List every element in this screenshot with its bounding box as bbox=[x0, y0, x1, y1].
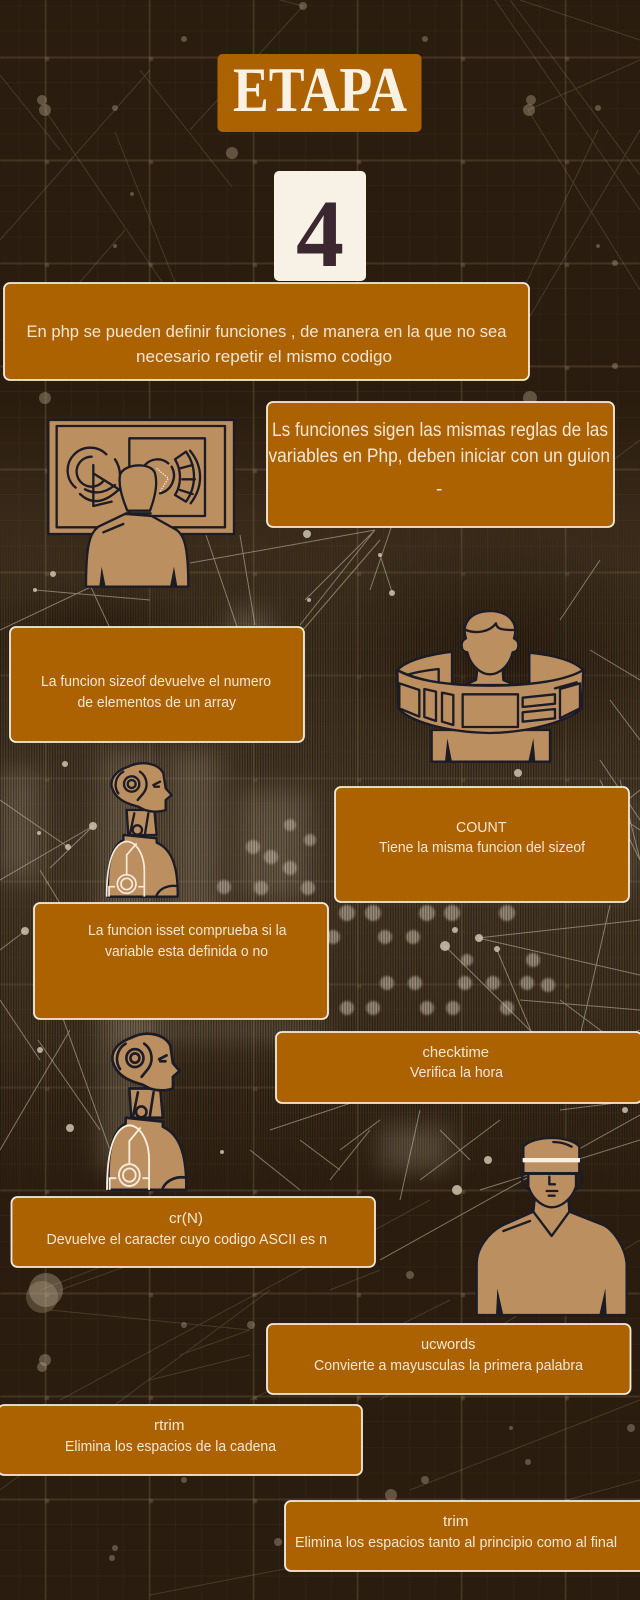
number card: 4: 4 bbox=[296, 180, 344, 287]
icon: person inside holographic ring bbox=[397, 611, 583, 762]
panel: reglas de las funciones: - bbox=[436, 479, 442, 500]
panel: checktime: checktime bbox=[422, 1045, 489, 1061]
panel: checktime bbox=[276, 1032, 640, 1103]
panel: cr(N) bbox=[12, 1197, 375, 1267]
panel: rtrim: Elimina los espacios de la cadena bbox=[65, 1439, 277, 1455]
panel: definir funciones: necesario repetir el mismo codigo bbox=[136, 347, 392, 366]
panel: ucwords bbox=[267, 1324, 630, 1394]
panel: reglas de las funciones bbox=[267, 402, 614, 527]
panel: reglas de las funciones: Ls funciones sigen las mismas reglas de las bbox=[272, 420, 608, 441]
icon: robot bust bbox=[107, 763, 178, 897]
panel: trim bbox=[285, 1501, 640, 1571]
panel: sizeof: La funcion sizeof devuelve el numero bbox=[41, 674, 271, 690]
panel: rtrim bbox=[0, 1405, 362, 1475]
icon: person at dashboard bbox=[48, 420, 234, 587]
panel: sizeof: de elementos de un array bbox=[78, 695, 237, 711]
hex lights bbox=[217, 819, 555, 1015]
number card: 4 bbox=[274, 171, 366, 287]
icon: robot bust large bbox=[107, 1034, 186, 1190]
panel: cr(N): cr(N) bbox=[169, 1211, 203, 1227]
panel: trim: Elimina los espacios tanto al principio como al final bbox=[295, 1535, 617, 1551]
panel: ucwords: Convierte a mayusculas la primera palabra bbox=[314, 1358, 584, 1374]
panel: checktime: Verifica la hora bbox=[410, 1065, 504, 1081]
panel: sizeof bbox=[10, 627, 304, 742]
icon: person with VR headset bbox=[477, 1138, 627, 1315]
panel: trim: trim bbox=[443, 1514, 468, 1530]
panel: COUNT: COUNT bbox=[456, 820, 507, 836]
bright network middle bbox=[0, 525, 640, 1260]
panel: rtrim: rtrim bbox=[154, 1418, 184, 1434]
panel: isset bbox=[34, 903, 328, 1019]
panel: definir funciones: En php se pueden definir funciones , de manera en la que no sea bbox=[26, 322, 507, 341]
panel: reglas de las funciones: variables en Php, deben iniciar con un guion bbox=[268, 446, 610, 467]
panel: cr(N): Devuelve el caracter cuyo codigo ASCII es n bbox=[46, 1232, 327, 1248]
panel: definir funciones bbox=[4, 283, 529, 380]
panel: ucwords: ucwords bbox=[421, 1337, 476, 1353]
panel: COUNT bbox=[335, 787, 629, 902]
panel: isset: variable esta definida o no bbox=[105, 944, 268, 960]
panel: isset: La funcion isset comprueba si la bbox=[88, 923, 287, 939]
panel: COUNT: Tiene la misma funcion del sizeof bbox=[379, 840, 586, 856]
title badge: ETAPA: ETAPA bbox=[233, 54, 407, 125]
